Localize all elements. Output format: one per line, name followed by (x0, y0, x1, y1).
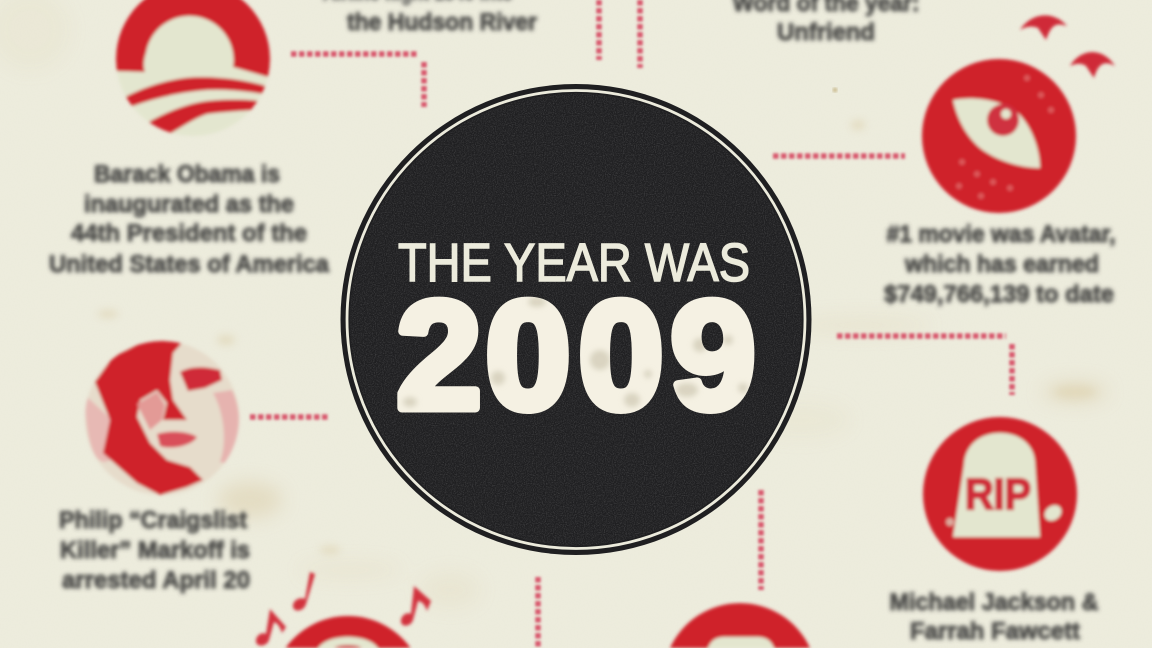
icon: music note (293, 572, 315, 611)
caption: Barack Obama: Barack Obama is (94, 161, 280, 188)
caption: Avatar: $749,766,139 to date (884, 281, 1114, 308)
caption: word of the year: Unfriend (777, 19, 875, 46)
caption: Hudson River (323, 0, 537, 36)
caption: Barack Obama: inaugurated as the (84, 191, 294, 218)
caption: Avatar: which has earned (904, 251, 1099, 278)
caption: Avatar: #1 movie was Avatar, (886, 221, 1116, 248)
worn texture on numerals (403, 297, 748, 407)
icon: Obama campaign logo (110, 0, 275, 136)
icon: bird (1070, 52, 1115, 78)
caption: Philip Markoff: Philip “Craigslist (59, 507, 247, 534)
caption: Barack Obama: 44th President of the (71, 220, 307, 247)
caption: Avatar (884, 221, 1116, 308)
icon: music note (401, 586, 431, 626)
caption: Hudson River: the Hudson River (347, 9, 537, 36)
central badge (340, 84, 812, 555)
caption: word of the year (732, 0, 920, 46)
icon: partially visible lower circle (670, 603, 810, 648)
caption: Michael Jackson and Farrah Fawcett: Farrah Fawcett (910, 618, 1080, 645)
icon: music note (256, 609, 286, 646)
caption: Barack Obama (49, 161, 330, 278)
caption: Michael Jackson and Farrah Fawcett (890, 589, 1098, 645)
caption: Philip Markoff (59, 507, 250, 594)
caption: Michael Jackson and Farrah Fawcett: Michael Jackson & (890, 589, 1098, 616)
dashed connector lines (250, 0, 1012, 648)
caption: Philip Markoff: arrested April 20 (62, 567, 250, 594)
icon: RIP tombstone (923, 417, 1077, 571)
heading: the year was: THE YEAR WAS (398, 233, 750, 293)
icon: Avatar eye with birds (922, 15, 1115, 213)
icon: vinyl record with music notes (256, 572, 431, 648)
icon: Philip Markoff portrait (85, 340, 240, 495)
caption: Barack Obama: United States of America (49, 251, 330, 278)
heading: 2009: 2009 (396, 270, 756, 441)
icon: bird (1020, 15, 1067, 40)
tombstone label: RIP (965, 470, 1031, 519)
caption: Philip Markoff: Killer” Markoff is (60, 537, 250, 564)
